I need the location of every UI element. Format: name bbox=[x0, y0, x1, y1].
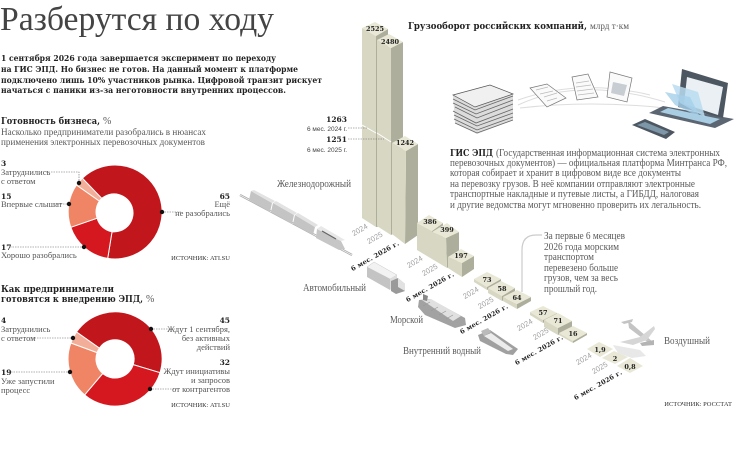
callout: 4 percent: 4 bbox=[1, 316, 6, 325]
road axis labels: 2024 bbox=[405, 254, 424, 270]
bar chart: railway bbox=[362, 22, 418, 244]
callout: 15 percent bbox=[1, 192, 71, 209]
bar chart: sea: 64 bbox=[512, 294, 522, 302]
air axis labels: 2024 bbox=[574, 351, 593, 367]
heading: business readiness bbox=[1, 116, 206, 148]
freight chart heading: Грузооборот российских компаний, bbox=[408, 21, 587, 32]
bar chart: road bbox=[417, 215, 474, 277]
callout: 3 percent: Затруднились bbox=[1, 167, 50, 177]
road axis labels: 6 мес. 2026 г. bbox=[405, 270, 455, 304]
callout: 15 percent: 15 bbox=[1, 192, 11, 201]
callout: 65 percent: не разобрались bbox=[175, 208, 230, 218]
callout: 4 percent: с ответом bbox=[1, 333, 36, 343]
callout: 65 percent: Ещё bbox=[214, 199, 230, 209]
bar chart: railway: 2480 bbox=[381, 38, 400, 46]
callout: sea transport note bbox=[522, 231, 625, 295]
source: ИСТОЧНИК: ATI.SU bbox=[171, 255, 230, 262]
bar chart: inland water bbox=[530, 306, 587, 343]
intro text block bbox=[1, 53, 322, 96]
inland axis labels: 6 мес. 2026 г. bbox=[514, 333, 564, 367]
sea axis labels: 2024 bbox=[461, 285, 480, 301]
callout: 45 percent: 45 bbox=[220, 316, 230, 325]
inland axis labels: 2024 bbox=[515, 317, 534, 333]
heading: business readiness: % bbox=[103, 116, 111, 127]
callout: 17 percent bbox=[1, 243, 86, 260]
panel: business readiness bbox=[1, 116, 230, 262]
callout: sea transport note: грузов, чем за весь bbox=[544, 273, 618, 284]
callout: 3 percent: с ответом bbox=[1, 176, 36, 186]
text block: GIS EPD description: которая собирает и хранит в цифровом виде все документы bbox=[450, 168, 681, 179]
callout: 65 percent: 65 bbox=[220, 192, 230, 201]
heading: business readiness: Готовность бизнеса, bbox=[1, 116, 100, 127]
callout: 32 percent bbox=[148, 358, 230, 394]
callout: sea transport note: перевезено больше bbox=[544, 263, 619, 274]
callout: 15 percent: Впервые слышат bbox=[1, 199, 63, 209]
icon: swoosh lines bbox=[518, 88, 665, 108]
transport labels: Внутренний водный bbox=[403, 346, 482, 357]
callout: 32 percent: 32 bbox=[220, 358, 230, 367]
icon: paper stack bbox=[453, 85, 513, 134]
callout: 3 percent: 3 bbox=[1, 159, 6, 168]
callout: 19 percent: Уже запустили bbox=[1, 376, 55, 386]
bar chart: air: 1,9 bbox=[594, 346, 606, 354]
heading: preparation: % bbox=[146, 294, 154, 305]
sea axis labels: 6 мес. 2026 г. bbox=[459, 302, 509, 336]
callout: 4 percent bbox=[1, 316, 75, 343]
callout: first half 2024 and 2025 values: 1263 bbox=[326, 115, 347, 124]
air axis labels: 2025 bbox=[590, 360, 609, 376]
railway axis labels: 2025 bbox=[365, 230, 384, 246]
callout: 3 percent bbox=[1, 159, 81, 186]
donut chart: preparation bbox=[68, 312, 162, 406]
bar chart: inland water: 57 bbox=[538, 309, 548, 317]
callout: sea transport note: За первые 6 месяцев bbox=[544, 231, 625, 242]
bar chart: railway: 2525 bbox=[366, 25, 385, 33]
callout: 32 percent: от контрагентов bbox=[172, 384, 230, 394]
callout: 17 percent: Хорошо разобрались bbox=[1, 250, 77, 260]
bar chart: air bbox=[587, 342, 643, 373]
transport labels: Морской bbox=[390, 315, 424, 326]
text block: GIS EPD description: транспортные накладные и путевые листы, а ГИБДД, налоговая bbox=[450, 189, 699, 200]
bar chart: air: 0,8 bbox=[624, 363, 636, 371]
icon: airplane bbox=[613, 319, 655, 358]
air axis labels: 6 мес. 2026 г. bbox=[573, 368, 623, 402]
sea axis labels bbox=[459, 285, 509, 336]
railway axis labels bbox=[350, 222, 400, 273]
bar chart: sea: 58 bbox=[497, 285, 507, 293]
bar chart: inland water: 71 bbox=[553, 317, 563, 325]
intro text block: подключено лишь 10% участников рынка. Цифровой транзит рискует bbox=[1, 75, 322, 86]
intro text block: 1 сентября 2026 года завершается эксперимент по переходу bbox=[1, 53, 277, 64]
callout: 65 percent bbox=[160, 192, 230, 218]
callout: sea transport note: 2026 года морским bbox=[544, 242, 620, 253]
callout: 32 percent: Ждут инициативы bbox=[164, 366, 230, 376]
icon: phone bbox=[632, 119, 675, 139]
bar chart: road: 197 bbox=[454, 252, 468, 260]
text block: GIS EPD description bbox=[450, 148, 727, 211]
icon: sea vessel bbox=[418, 294, 466, 328]
heading: business readiness: Насколько предприниматели разобрались в нюансах bbox=[1, 127, 206, 138]
icon: laptop bbox=[649, 69, 734, 128]
railway axis labels: 6 мес. 2026 г. bbox=[350, 239, 400, 273]
icon: flying document 1 bbox=[530, 84, 566, 107]
bar chart: inland water: 16 bbox=[568, 330, 578, 338]
inland axis labels bbox=[514, 317, 564, 367]
bar chart: air: 2 bbox=[613, 355, 617, 363]
source: Rosstat: ИСТОЧНИК: РОССТАТ bbox=[664, 401, 732, 408]
callout: first half 2024 and 2025 values: 6 мес. 2025 г. bbox=[307, 147, 347, 154]
heading: preparation: готовятся к внедрению ЭПД, bbox=[1, 294, 143, 305]
road axis labels bbox=[405, 254, 455, 304]
transport labels: Железнодорожный bbox=[277, 179, 352, 190]
callout: 45 percent: действий bbox=[197, 342, 230, 352]
inland axis labels: 2025 bbox=[531, 326, 550, 342]
callout: 45 percent: Ждут 1 сентября, bbox=[167, 324, 230, 334]
callout: sea transport note: транспортом bbox=[544, 252, 595, 263]
callout: first half 2024 and 2025 values bbox=[307, 115, 384, 154]
callout: 19 percent: процесс bbox=[1, 385, 30, 395]
callout: 17 percent: 17 bbox=[1, 243, 11, 252]
callout: first half 2024 and 2025 values: 1251 bbox=[326, 135, 347, 144]
bar chart: road: 386 bbox=[423, 218, 437, 226]
sea axis labels: 2025 bbox=[476, 295, 495, 311]
callout: 45 percent: без активных bbox=[182, 333, 231, 343]
intro text block: начаться с паники из-за неготовности внутренних процессов. bbox=[1, 86, 286, 96]
callout: 4 percent: Затруднились bbox=[1, 324, 50, 334]
bar chart: road: 399 bbox=[440, 226, 454, 234]
heading: preparation bbox=[1, 284, 154, 305]
icon: flying document 3 bbox=[607, 72, 632, 102]
heading: preparation: Как предприниматели bbox=[1, 284, 114, 295]
icon: train bbox=[240, 190, 352, 255]
text block: GIS EPD description: на перевозку грузов. В неё компании отправляют электронные bbox=[450, 179, 696, 190]
transport labels: Воздушный bbox=[664, 336, 711, 347]
transport labels bbox=[277, 179, 711, 357]
air axis labels bbox=[573, 351, 623, 402]
callout: 45 percent bbox=[149, 316, 231, 352]
callout: 19 percent: 19 bbox=[1, 368, 11, 377]
icon: flying document 2 bbox=[572, 74, 598, 100]
text block: GIS EPD description: ГИС ЭПД bbox=[450, 149, 493, 159]
source: ИСТОЧНИК: ATI.SU bbox=[171, 402, 230, 409]
intro text block: на ГИС ЭПД. Но бизнес не готов. На данный момент к платформе bbox=[1, 64, 299, 75]
freight chart heading: млрд т·км bbox=[590, 21, 629, 31]
transport labels: Автомобильный bbox=[303, 283, 367, 294]
icon: inland vessel bbox=[478, 328, 518, 355]
icon: truck bbox=[367, 262, 405, 294]
bar chart: sea bbox=[474, 272, 531, 309]
donut chart: business readiness bbox=[68, 165, 162, 259]
callout: first half 2024 and 2025 values: 6 мес. 2024 г. bbox=[307, 126, 347, 133]
callout: 32 percent: и запросов bbox=[191, 375, 230, 385]
text block: GIS EPD description: (Государственная информационная система электронных bbox=[496, 148, 720, 159]
heading: business readiness: применения электронных перевозочных документов bbox=[1, 138, 205, 148]
illustration: paper stack to laptop bbox=[453, 69, 734, 139]
bar chart: sea: 73 bbox=[482, 276, 492, 284]
panel: preparation for EPD bbox=[1, 284, 231, 409]
road axis labels: 2025 bbox=[420, 262, 439, 278]
bar chart: railway: 1242 bbox=[396, 139, 414, 147]
title: Разберутся по ходу bbox=[0, 1, 274, 38]
callout: 19 percent bbox=[1, 368, 72, 395]
callout: sea transport note: прошлый год. bbox=[544, 284, 597, 295]
railway axis labels: 2024 bbox=[350, 222, 369, 238]
text block: GIS EPD description: и другие ведомства могут мгновенно проверить их легальность. bbox=[450, 200, 701, 211]
